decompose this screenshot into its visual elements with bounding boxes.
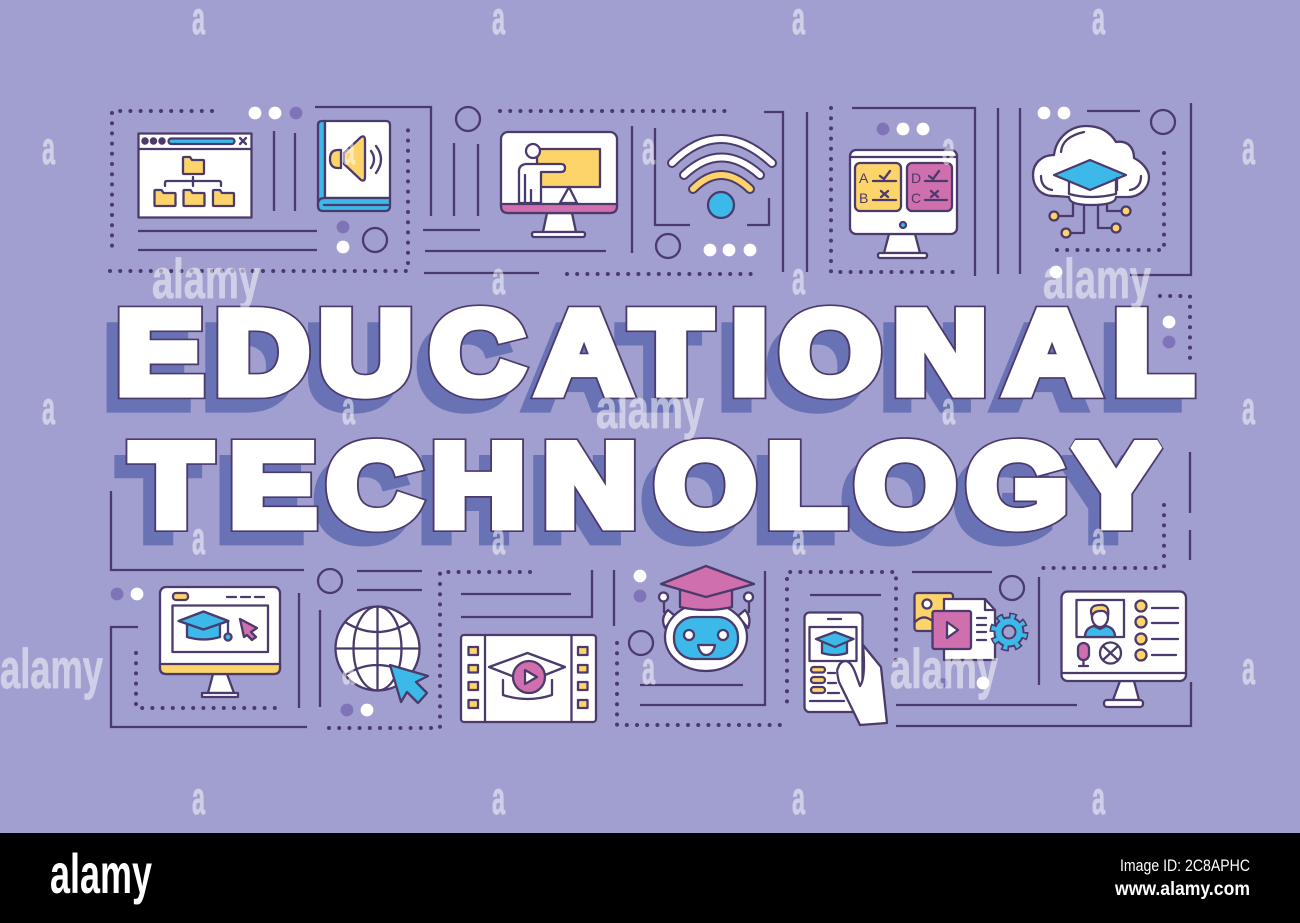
title: EDUCATIONAL	[117, 288, 1193, 418]
footer logo: alamy	[50, 842, 152, 905]
icon: online test monitor: D	[911, 170, 921, 186]
icon: online test monitor: A	[859, 170, 869, 186]
watermarks: a	[492, 772, 505, 824]
watermarks: a	[42, 122, 55, 174]
title shadow: TECHNOLOGY	[119, 435, 1146, 566]
icon: teacher at screen monitor	[501, 132, 617, 237]
watermarks: alamy	[0, 637, 103, 700]
watermarks: a	[342, 122, 355, 174]
icon: robot with graduation cap	[659, 566, 754, 671]
watermarks: a	[942, 382, 955, 434]
watermarks: a	[792, 252, 805, 304]
watermarks: alamy	[890, 637, 998, 700]
icon: online test monitor: C	[911, 190, 921, 206]
watermarks: a	[1092, 772, 1105, 824]
title	[117, 288, 1193, 551]
icon: browser window with folder tree	[138, 134, 252, 218]
watermarks: a	[642, 642, 655, 694]
icon: media files and gear	[914, 593, 1024, 660]
image id: Image ID: 2C8APHC	[1120, 856, 1250, 875]
title shadow	[104, 303, 1180, 566]
title: TECHNOLOGY	[132, 420, 1159, 551]
watermarks: a	[792, 512, 805, 564]
watermarks: a	[492, 252, 505, 304]
icon: globe with cursor	[336, 606, 428, 703]
icon: e-learning monitor with cap and cursor	[160, 587, 280, 697]
icon: film strip video lesson	[461, 635, 596, 722]
title: TECHNOLOGY	[132, 420, 1159, 551]
watermarks: a	[192, 512, 205, 564]
watermarks: a	[342, 642, 355, 694]
watermarks: alamy	[1043, 247, 1151, 310]
watermarks: a	[642, 122, 655, 174]
title shadow: EDUCATIONAL	[104, 303, 1180, 433]
icon: audio book	[318, 121, 390, 211]
watermarks: a	[1242, 122, 1255, 174]
icon: wifi signal	[672, 139, 772, 218]
title: EDUCATIONAL	[117, 288, 1193, 418]
watermarks: a	[492, 512, 505, 564]
watermarks: a	[192, 772, 205, 824]
watermarks: a	[42, 382, 55, 434]
watermarks: a	[792, 772, 805, 824]
watermarks: a	[1092, 512, 1105, 564]
icon: online test monitor	[850, 150, 957, 258]
watermarks: alamy	[596, 377, 704, 440]
watermarks: a	[342, 382, 355, 434]
icon: online test monitor: B	[859, 190, 868, 206]
website: www.alamy.com	[1114, 879, 1250, 900]
icon: video conference monitor	[1062, 592, 1186, 707]
footer bar	[0, 833, 1300, 923]
watermarks: a	[1242, 382, 1255, 434]
watermarks: a	[1242, 642, 1255, 694]
watermarks: alamy	[152, 247, 260, 310]
icon: smartphone in hand	[804, 612, 887, 725]
watermarks: a	[942, 122, 955, 174]
icon: cloud with graduation cap and circuit	[1033, 126, 1149, 238]
